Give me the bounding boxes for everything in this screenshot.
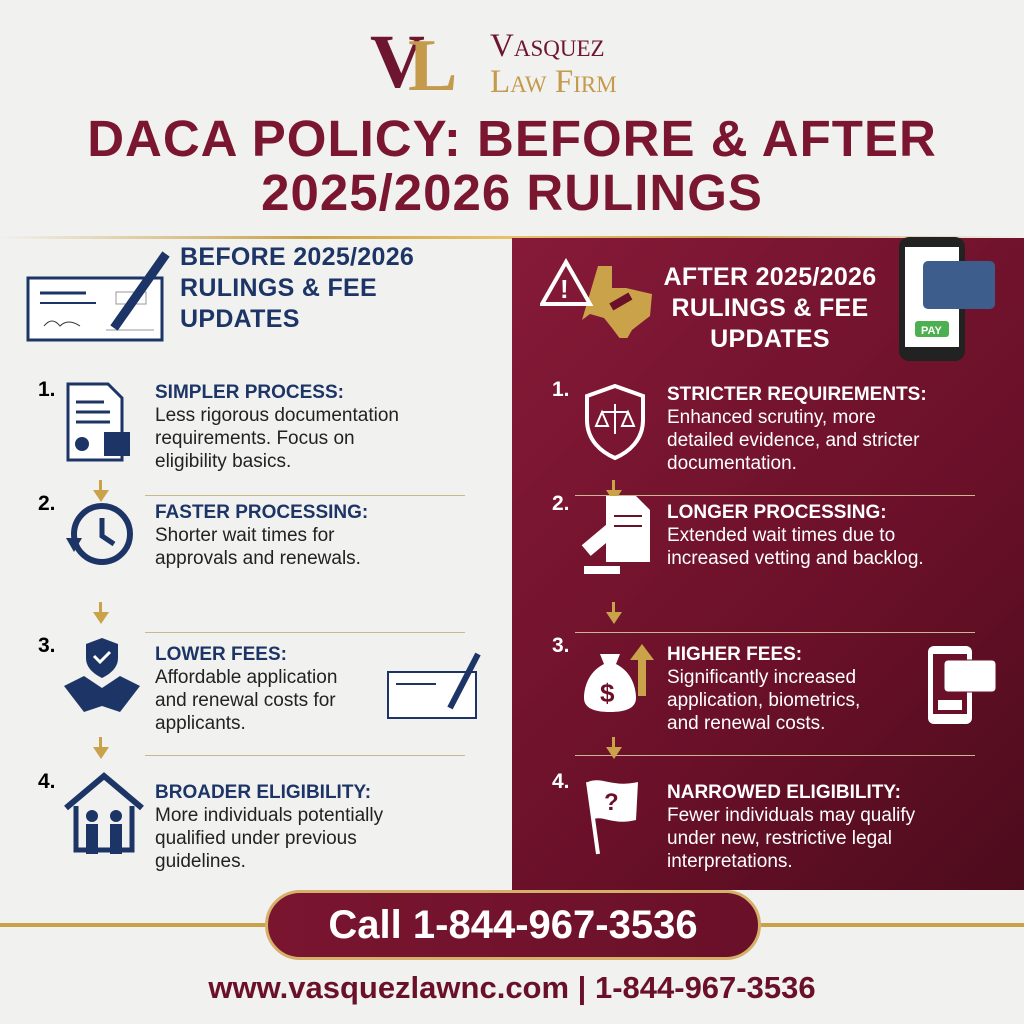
heading: before: UPDATES	[180, 305, 300, 333]
item 3: $	[600, 678, 615, 708]
item 3: and renewal costs.	[667, 713, 825, 734]
icon: warning texas	[540, 258, 652, 338]
item 4: under new, restrictive legal	[667, 828, 892, 849]
item 1: Less rigorous documentation	[155, 405, 399, 426]
heading: before	[180, 243, 414, 333]
item 4	[552, 770, 916, 872]
panel: after background	[512, 238, 1024, 890]
item 3: LOWER FEES:	[155, 644, 287, 665]
icon: phone card	[899, 237, 995, 361]
arrow	[93, 737, 109, 759]
heading: before: BEFORE 2025/2026	[180, 243, 414, 271]
item 3: HIGHER FEES:	[667, 644, 802, 665]
item 3: application, biometrics,	[667, 690, 860, 711]
heading: after: UPDATES	[710, 325, 830, 353]
item 1: 1.	[38, 378, 56, 401]
item 4: guidelines.	[155, 851, 246, 872]
arrow	[93, 602, 109, 624]
heading: before: RULINGS & FEE	[180, 274, 377, 302]
item 1: 1.	[552, 378, 570, 401]
heading: after: AFTER 2025/2026	[664, 263, 876, 291]
item 4: qualified under previous	[155, 828, 357, 849]
arrow	[606, 737, 622, 759]
icon: phone card: PAY	[921, 325, 942, 337]
logo: Vasquez	[490, 28, 605, 64]
item 1: Enhanced scrutiny, more	[667, 407, 876, 428]
panel: before items	[38, 378, 481, 872]
item 2: Extended wait times due to	[667, 525, 895, 546]
arrow	[93, 480, 109, 502]
item 1	[552, 378, 927, 474]
item 1: detailed evidence, and stricter	[667, 430, 919, 451]
logo: V	[370, 20, 425, 104]
item 1	[38, 378, 399, 472]
heading: after: RULINGS & FEE	[672, 294, 868, 322]
title	[87, 110, 937, 221]
item 1: SIMPLER PROCESS:	[155, 382, 344, 403]
item 4: ?	[604, 789, 619, 816]
item 1: documentation.	[667, 453, 797, 474]
icon: check	[26, 251, 170, 342]
heading: after	[664, 263, 876, 353]
arrow	[606, 480, 622, 496]
item 4: 4.	[552, 770, 570, 793]
item 3: Significantly increased	[667, 667, 856, 688]
item 2: 2.	[38, 492, 56, 515]
title: DACA POLICY: BEFORE & AFTER	[87, 110, 937, 167]
item 2: increased vetting and backlog.	[667, 548, 924, 569]
item 4: More individuals potentially	[155, 805, 383, 826]
item 1: eligibility basics.	[155, 451, 291, 472]
item 3: Affordable application	[155, 667, 337, 688]
call button: Call 1-844-967-3536	[328, 903, 698, 947]
item 3: 3.	[38, 634, 56, 657]
item 3: and renewal costs for	[155, 690, 336, 711]
item 3: 3.	[552, 634, 570, 657]
item 2: LONGER PROCESSING:	[667, 502, 887, 523]
item 4: Fewer individuals may qualify	[667, 805, 915, 826]
item 3: applicants.	[155, 713, 246, 734]
item 2: FASTER PROCESSING:	[155, 502, 368, 523]
item 4: 4.	[38, 770, 56, 793]
item 2	[38, 492, 368, 569]
item 2: approvals and renewals.	[155, 548, 361, 569]
call button	[265, 890, 761, 960]
logo: L	[408, 25, 457, 107]
item 3	[38, 634, 481, 734]
item 2: 2.	[552, 492, 570, 515]
logo: Law Firm	[490, 64, 617, 100]
item 2: Shorter wait times for	[155, 525, 334, 546]
arrow	[606, 602, 622, 624]
icon: warning texas: !	[560, 274, 569, 304]
item 2	[552, 492, 924, 574]
item 3	[552, 634, 996, 734]
panel: after items	[552, 378, 996, 872]
title: 2025/2026 RULINGS	[261, 164, 763, 221]
item 4: BROADER ELIGIBILITY:	[155, 782, 371, 803]
item 4: interpretations.	[667, 851, 793, 872]
logo	[370, 20, 617, 107]
footer website: www.vasquezlawnc.com | 1-844-967-3536	[208, 970, 816, 1005]
item 1: STRICTER REQUIREMENTS:	[667, 384, 927, 405]
item 1: requirements. Focus on	[155, 428, 355, 449]
item 4: NARROWED ELIGIBILITY:	[667, 782, 901, 803]
item 4	[38, 770, 383, 872]
